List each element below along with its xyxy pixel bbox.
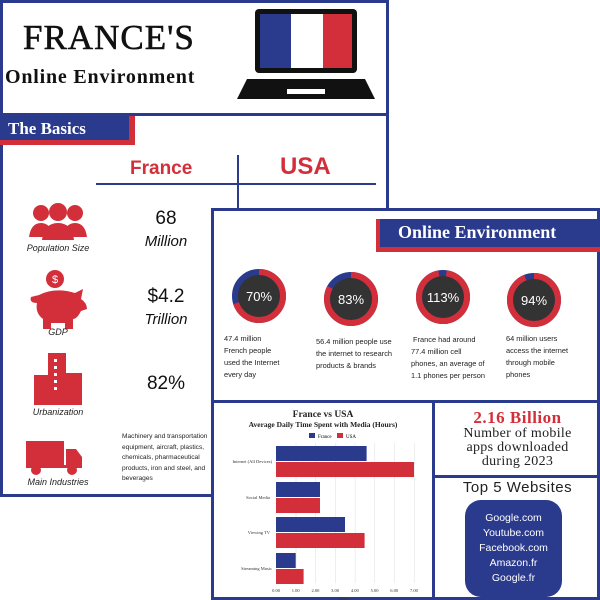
website list	[465, 500, 562, 597]
bar chart	[232, 410, 419, 600]
donut stats	[224, 269, 568, 380]
row: GDP: $4.2	[148, 286, 184, 307]
stat 1: 47.4 million French people used the Internet every day	[224, 334, 279, 379]
icon: truck	[26, 441, 82, 475]
bar chart: Social Media	[246, 495, 270, 500]
column headers: France	[130, 158, 192, 179]
stat 4: 64 million users access the internet through mobile phones	[506, 334, 568, 379]
row: main industries: Machinery and transportation equipment, aircraft, plastics, chemicals, pharmaceutical products, iron and steel, and beverages	[122, 433, 207, 482]
stat 1	[224, 269, 286, 379]
panel: right card	[211, 208, 600, 600]
heading: The Basics	[0, 116, 135, 145]
website list: Google.fr	[492, 572, 535, 584]
row: population	[27, 203, 187, 253]
stat 3: France had around 77.4 million cell phones, an average of 1.1 phones per person	[411, 335, 485, 380]
panel: Top 5 Websites: Top 5 Websites	[463, 479, 572, 496]
callout: 2.16 Billion: 2.16 Billion	[473, 408, 562, 427]
panel: left card: USA	[280, 153, 331, 180]
callout: 2.16 Billion: during 2023	[482, 454, 553, 469]
callout: 2.16 Billion	[463, 408, 572, 469]
row: GDP: GDP	[48, 327, 68, 337]
callout: 2.16 Billion: apps downloaded	[466, 440, 569, 455]
stat 2: 83%	[338, 292, 364, 307]
bar chart: 6.00	[390, 588, 399, 593]
bar chart: 4.00	[351, 588, 359, 593]
panel: Top 5 Websites	[463, 479, 572, 597]
icon: piggy bank: $	[52, 274, 58, 286]
bar chart: USA	[346, 435, 356, 440]
stat 2: 56.4 million people use the internet to research products & brands	[316, 337, 392, 370]
icon: laptop with flag	[237, 9, 375, 99]
website list: Facebook.com	[479, 542, 548, 554]
bar chart: 7.00	[410, 588, 419, 593]
stat 4: 94%	[521, 293, 547, 308]
stat 3	[411, 270, 485, 380]
bar chart: Viewing TV	[248, 530, 271, 535]
row: population: Population Size	[27, 243, 89, 253]
row: population: 68	[155, 208, 177, 229]
bar chart: 3.00	[331, 588, 340, 593]
website list: Youtube.com	[483, 527, 544, 539]
panel: left card	[0, 0, 389, 497]
website list: Amazon.fr	[490, 557, 537, 569]
bar chart: Internet (All Devices)	[233, 459, 272, 464]
heading: Online Environment	[376, 219, 600, 252]
row: main industries: Main Industries	[27, 477, 89, 487]
stat 2	[316, 272, 392, 370]
website list: Google.com	[485, 512, 542, 524]
bar chart: France vs USA	[293, 410, 353, 420]
bar chart: 1.00	[292, 588, 300, 593]
row: urbanization: Urbanization	[33, 407, 83, 417]
bar chart: 0.00	[272, 588, 281, 593]
icon: buildings	[34, 353, 82, 405]
stat 3: 113%	[427, 290, 460, 305]
stat 1: 70%	[246, 289, 272, 304]
row: main industries	[26, 433, 207, 487]
stat 4	[506, 273, 568, 379]
icon: people	[29, 203, 87, 240]
callout: 2.16 Billion: Number of mobile	[463, 426, 572, 441]
heading: Online Environment: Online Environment	[398, 222, 556, 242]
title: FRANCE'S	[23, 18, 195, 57]
bar chart: 5.00	[371, 588, 379, 593]
bar chart: Streaming Music	[241, 566, 272, 571]
icon: piggy bank	[30, 270, 87, 329]
bar chart: 2.00	[311, 588, 320, 593]
heading: The Basics: The Basics	[8, 119, 86, 138]
bar chart: France	[318, 435, 332, 440]
row: urbanization	[33, 353, 185, 417]
row: GDP: Trillion	[144, 311, 188, 328]
row: population: Million	[145, 233, 187, 250]
bar chart: Average Daily Time Spent with Media (Hours)	[249, 420, 398, 429]
row: GDP	[30, 270, 188, 337]
subtitle: Online Environment	[5, 66, 195, 88]
row: urbanization: 82%	[147, 373, 185, 394]
